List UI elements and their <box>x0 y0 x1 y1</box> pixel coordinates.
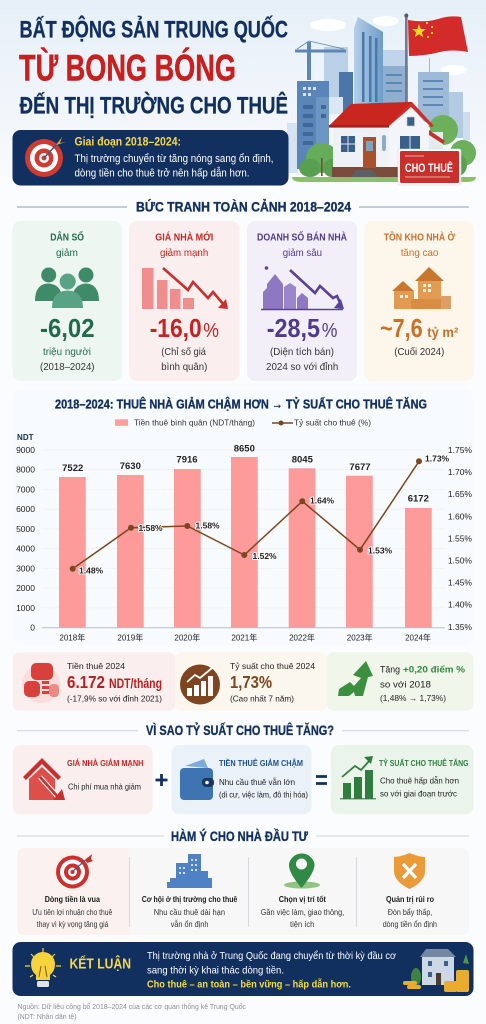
line values: 1.64% <box>310 495 335 505</box>
panel: rent 2024: (-17,9% so với đỉnh 2021) <box>67 694 162 704</box>
panel: conclusion: sang thời kỳ khai thác dòng tiền. <box>147 964 284 976</box>
panel: new home prices <box>129 221 240 381</box>
panel: conclusion <box>12 942 474 996</box>
right axis <box>448 445 472 632</box>
left axis <box>16 433 35 633</box>
icon: green up arrow <box>338 661 373 696</box>
panel: rents fall slowly <box>172 745 312 814</box>
panel: new home prices: % <box>203 320 219 342</box>
item: rental opportunity: vẫn ổn định <box>171 920 208 929</box>
x axis: 2019年 <box>117 633 143 643</box>
item: rental opportunity: Cơ hội ở thị trường cho thuê <box>142 894 238 904</box>
bar values: 7630 <box>120 461 141 472</box>
panel: yield gain: so với 2018 <box>380 679 431 689</box>
panel: home prices fall: Chi phí mua nhà giảm <box>68 781 141 791</box>
panel: new home prices: giảm mạnh <box>160 247 208 259</box>
source note: (NDT: Nhân dân tệ) <box>18 1012 76 1021</box>
panel: home sales: giảm sâu <box>283 247 322 259</box>
item: cash flow: Ưu tiên lợi nhuận cho thuê <box>32 908 113 917</box>
panel: rent and yield chart <box>12 389 474 645</box>
item: risk management <box>383 853 437 929</box>
icon: city buildings <box>167 854 212 888</box>
line values <box>79 454 450 575</box>
icon: coins <box>22 663 60 703</box>
source note: Nguồn: Dữ liệu công bố 2018–2024 của các cơ quan thống kê Trung Quốc <box>18 1002 246 1011</box>
panel: population: giảm <box>56 247 78 259</box>
panel: yield 2024: Tỷ suất cho thuê 2024 <box>230 661 315 671</box>
icon: bar chart rising <box>340 756 376 799</box>
item: location: Gần việc làm, giao thông, <box>261 908 344 917</box>
panel: investor implications <box>17 848 469 935</box>
left axis: 3000 <box>16 563 35 573</box>
left axis: 1000 <box>16 603 35 613</box>
panel: home prices fall: GIÁ NHÀ GIẢM MẠNH <box>67 757 144 768</box>
line: rental yield <box>70 458 422 572</box>
heading: why yields rise: VÌ SAO TỶ SUẤT CHO THUÊ TĂNG? <box>146 721 334 738</box>
bar values: 7677 <box>349 462 371 473</box>
hero illustration: city, flag and house for rent <box>287 14 476 185</box>
icon: crane <box>295 41 346 80</box>
panel: home sales: -28,5 <box>267 313 320 343</box>
x axis: 2022年 <box>289 633 315 643</box>
icon: target with arrow <box>25 137 66 177</box>
panel: rental yield rises: so với giai đoạn trước <box>380 789 458 799</box>
source note <box>18 1002 246 1021</box>
icon: house with falling arrow <box>23 758 65 800</box>
icon: plus <box>156 774 168 786</box>
panel: conclusion: Cho thuê – an toàn – bền vững – hấp dẫn hơn. <box>147 977 351 990</box>
panel: yield 2024: (Cao nhất 7 năm) <box>230 694 294 704</box>
panel: population: DÂN SỐ <box>50 230 84 244</box>
panel: housing inventory: TỒN KHO NHÀ Ở <box>384 231 455 244</box>
icon: wallet <box>180 759 214 800</box>
left axis: 8000 <box>16 465 35 475</box>
left axis: 6000 <box>16 504 35 514</box>
panel: rental yield rises: TỶ SUẤT CHO THUÊ TĂNG <box>379 757 469 768</box>
icon: rising chart in circle <box>180 664 220 704</box>
right axis: 1.55% <box>448 533 472 543</box>
panel: housing inventory: (Cuối 2024) <box>394 346 444 358</box>
item: rental opportunity <box>142 854 238 929</box>
icon: stacked houses <box>392 267 451 309</box>
legend: Tỷ suất cho thuê (%) <box>294 418 371 428</box>
panel: rents fall slowly: TIỀN THUÊ GIẢM CHẬM <box>219 757 303 768</box>
line values: 1.58% <box>196 520 220 530</box>
panel: period callout: Thị trường chuyển từ tăng nóng sang ổn định, <box>74 153 274 165</box>
right axis: 1.40% <box>448 600 472 610</box>
panel: new home prices: (Chỉ số giá <box>161 346 206 358</box>
left axis: 2000 <box>16 583 35 593</box>
x axis <box>59 633 431 643</box>
panel: rental yield rises: Cho thuê hấp dẫn hơn <box>380 776 459 786</box>
bars <box>59 457 432 628</box>
right axis: 1.50% <box>448 556 472 566</box>
panel: rents fall slowly: (di cư, việc làm, đô thị hóa) <box>219 791 308 800</box>
panel: home sales: 2024 so với đỉnh <box>266 361 338 373</box>
panel: conclusion: Thị trường nhà ở Trung Quốc đang chuyển từ thời kỳ đầu cơ <box>147 950 396 962</box>
item: cash flow: thay vì kỳ vọng tăng giá <box>37 920 109 929</box>
panel: period callout: dòng tiền cho thuê trở nên hấp dẫn hơn. <box>74 167 250 180</box>
left axis: 4000 <box>16 544 35 554</box>
item: cash flow: Dòng tiền là vua <box>45 894 100 904</box>
panel: rent 2024: 6.172 <box>67 672 105 692</box>
icon: for-rent sign: CHO THUÊ <box>405 162 453 175</box>
icon: house with gold coins <box>403 949 469 992</box>
icon: falling bars and arrow <box>142 268 228 309</box>
x axis: 2018年 <box>59 633 85 643</box>
icon: shield with tools <box>394 853 425 889</box>
right axis: 1.65% <box>448 489 472 499</box>
panel: population <box>12 221 122 381</box>
panel: home sales: % <box>322 320 338 342</box>
icon: target <box>56 854 93 888</box>
icon: equals <box>316 776 327 784</box>
panel: home sales: DOANH SỐ BÁN NHÀ <box>257 230 347 244</box>
panel: period callout <box>12 130 288 186</box>
line values: 1.52% <box>252 551 277 561</box>
x axis: 2021年 <box>231 633 257 643</box>
panel: home sales: (Diện tích bán) <box>270 346 334 358</box>
left axis: 9000 <box>16 445 35 455</box>
x axis: 2024年 <box>405 633 431 643</box>
panel: new home prices: bình quân) <box>161 361 207 373</box>
heading: overview: BỨC TRANH TOÀN CẢNH 2018–2024 <box>136 198 351 215</box>
panel: housing inventory: tăng cao <box>401 247 439 259</box>
heading: implications: HÀM Ý CHO NHÀ ĐẦU TƯ <box>171 829 309 844</box>
right axis: 1.45% <box>448 578 472 588</box>
icon: trees <box>299 115 476 177</box>
title: ĐẾN THỊ TRƯỜNG CHO THUÊ <box>20 91 288 119</box>
panel: yield 2024: 1,73% <box>230 672 272 692</box>
title: BẤT ĐỘNG SẢN TRUNG QUỐC <box>20 15 288 44</box>
left axis: 5000 <box>16 524 35 534</box>
icon: map pin <box>284 854 320 888</box>
item: cash flow <box>32 854 113 929</box>
panel: housing inventory: ~7,6 <box>380 313 423 343</box>
panel: conclusion: KẾT LUẬN <box>70 954 131 972</box>
line values: 1.48% <box>79 565 104 575</box>
left axis: 7000 <box>16 484 35 494</box>
panel: yield gain: +0,20 điểm % <box>403 664 466 675</box>
right axis: 1.70% <box>448 467 472 477</box>
panel: home sales <box>247 221 357 381</box>
panel: population: -6,02 <box>40 313 94 343</box>
item: location: tiện ích <box>290 920 314 929</box>
panel: housing inventory: tỷ m² <box>427 324 459 340</box>
bar values <box>62 443 429 505</box>
item: risk management: dòng tiền ổn định <box>383 920 437 929</box>
panel: home prices fall <box>12 745 152 814</box>
x axis: 2020年 <box>174 633 200 643</box>
item: location: Chọn vị trí tốt <box>279 894 326 904</box>
item: location <box>261 854 344 929</box>
title <box>19 15 288 119</box>
line values: 1.53% <box>368 545 393 555</box>
icon: buildings and falling arrow <box>261 266 344 310</box>
bar values: 7522 <box>62 463 83 474</box>
bar values: 7916 <box>176 454 198 465</box>
panel: new home prices: -16,0 <box>150 313 202 343</box>
title: TỪ BONG BÓNG <box>19 46 236 88</box>
left axis: NDT <box>17 433 34 442</box>
panel: rent 2024: NDT/tháng <box>109 676 162 691</box>
item: risk management: Quản trị rủi ro <box>386 894 434 904</box>
panel: rent 2024 <box>12 652 176 711</box>
panel: yield gain: Tăng <box>380 664 400 674</box>
panel: new home prices: GIÁ NHÀ MỚI <box>155 231 213 244</box>
panel: period callout: Giai đoạn 2018–2024: <box>74 137 181 149</box>
icon: house <box>329 102 445 177</box>
panel: population: triệu người <box>43 346 91 358</box>
right axis: 1.75% <box>448 445 472 455</box>
line values: 1.58% <box>138 523 163 533</box>
line values: 1.73% <box>425 454 450 464</box>
panel: housing inventory <box>364 221 474 381</box>
item: rental opportunity: Nhu cầu thuê dài hạn <box>154 908 225 917</box>
legend: Tiền thuê bình quân (NDT/tháng) <box>134 418 255 428</box>
x axis: 2023年 <box>347 633 373 643</box>
bar values: 8045 <box>292 454 314 465</box>
icon: light bulb <box>25 948 61 987</box>
panel: population: (2018–2024) <box>40 361 94 373</box>
item: risk management: Đòn bẩy thấp, <box>388 908 432 917</box>
chart title: 2018–2024: THUÊ NHÀ GIẢM CHẬM HƠN → TỶ SUẤT CHO THUÊ TĂNG <box>55 396 427 411</box>
icon: people <box>35 268 99 308</box>
icon: for-rent sign <box>398 149 461 185</box>
panel: yield 2024 <box>175 652 327 711</box>
left axis: 0 <box>30 623 35 633</box>
bar values: 6172 <box>408 494 429 505</box>
bar values: 8650 <box>234 443 255 454</box>
panel: yield gain: (1,48% → 1,73%) <box>380 693 446 703</box>
right axis: 1.35% <box>448 622 472 632</box>
right axis: 1.60% <box>448 511 472 521</box>
icon: flag of China <box>404 14 468 105</box>
panel: yield gain <box>327 652 474 711</box>
panel: rent 2024: Tiền thuê 2024 <box>67 661 125 671</box>
panel: rents fall slowly: Nhu cầu thuê vẫn lớn <box>219 777 295 787</box>
panel: rental yield rises <box>331 745 474 814</box>
legend <box>115 418 371 428</box>
